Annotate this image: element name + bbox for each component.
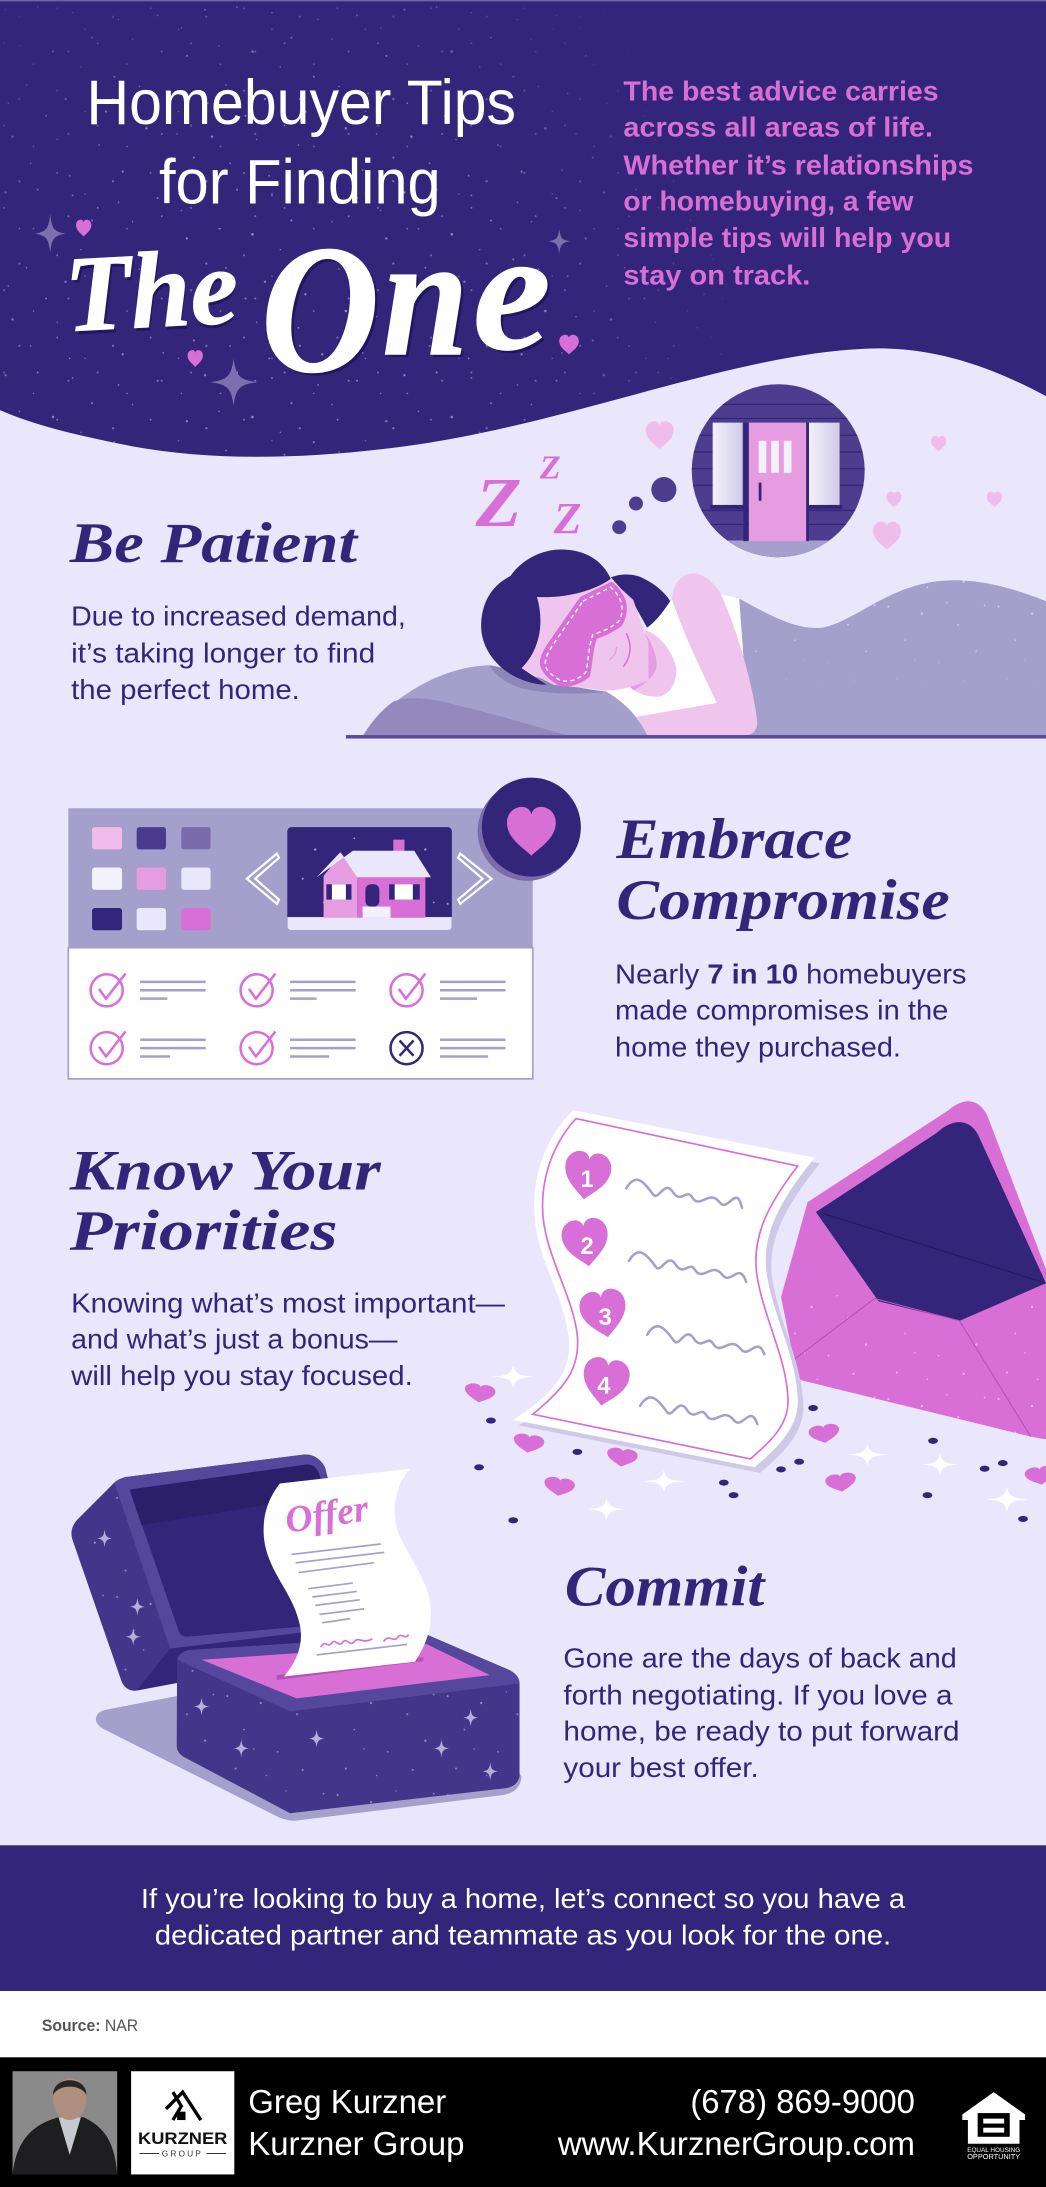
heading: embrace compromise [615,808,950,932]
heading: know your priorities: Know Your [69,1140,382,1203]
header panel [0,0,1046,474]
icon: equal housing opportunity: OPPORTUNITY [967,2154,1021,2161]
text: priorities body: Knowing what’s most important— [71,1287,505,1318]
icon: x mark [391,1032,423,1064]
source strip [0,1991,1046,2058]
title: the one: e [473,196,551,387]
heading: commit: Commit [565,1555,767,1618]
intro paragraph: The best advice carries [623,75,939,106]
illustration: sleeping woman dreaming of a home [346,384,1046,739]
illustration: ring box with offer [71,1455,522,1821]
text: be patient body: Due to increased demand, [71,601,406,632]
illustration: priorities list paper [513,1110,820,1473]
intro paragraph: Whether it’s relationships [623,149,973,180]
call to action band: dedicated partner and teammate as you look for the one. [155,1919,891,1950]
text: commit body: home, be ready to put forward [563,1716,960,1747]
text: compromise body: made compromises in the [615,995,948,1026]
heading: be patient: Be Patient [69,512,359,575]
heart number 1 [561,1149,613,1202]
heading: know your priorities: Priorities [69,1200,338,1263]
agent name [248,2084,464,2163]
icon: dream house bubble [692,384,865,558]
text: priorities body: and what’s just a bonus— [71,1324,398,1355]
text: compromise body [615,958,967,1063]
heading: embrace compromise: Embrace [615,808,852,871]
icon: heart badge [478,778,581,881]
source strip: Source: NAR [42,2016,138,2035]
illustration: envelope [774,1101,1046,1444]
intro paragraph: across all areas of life. [623,112,933,143]
title: homebuyer tips: Homebuyer Tips [86,68,516,138]
text: be patient body: the perfect home. [71,674,300,705]
heart number 3: 3 [599,1305,612,1331]
intro paragraph: simple tips will help you [623,222,951,253]
agency logo: KURZNER [138,2129,227,2148]
icon: sleeping z letters: Z [553,493,582,543]
heart number 2: 2 [581,1234,594,1260]
box lid [71,1455,365,1691]
icon: sleeping z letters: Z [539,449,561,486]
blanket [736,572,1046,739]
confetti hearts, stars and dots [463,1365,1046,1523]
icon: equal housing opportunity: EQUAL HOUSING [967,2147,1020,2154]
section: know your priorities [69,1101,1046,1523]
box shadow [96,1696,522,1821]
heart number 4 [579,1355,632,1410]
offer letter [264,1469,431,1677]
text: compromise body: Nearly 7 in 10 homebuyers [615,958,967,989]
section: be patient [69,384,1046,739]
title: the one: O [261,207,379,411]
intro paragraph: stay on track. [623,260,810,291]
title: the one: O [264,210,382,414]
call to action band [0,1845,1046,1991]
title: the one [62,196,554,414]
text: commit body: your best offer. [563,1752,759,1783]
agency logo [131,2071,234,2174]
icon: sleeping z letters: Z [475,465,522,542]
icon: equal housing opportunity [962,2092,1025,2161]
agent contact: www.KurznerGroup.com [557,2126,915,2163]
woman head with sleep mask [481,550,676,697]
agent photo [13,2071,117,2174]
text: be patient body [71,601,406,705]
title: the one: n [385,204,471,395]
text: priorities body [70,1287,505,1391]
text placeholder lines [140,982,506,1057]
agent name: Greg Kurzner [248,2084,446,2121]
heart number 2 [560,1216,612,1269]
title: the one: The [65,229,241,359]
agent contact: (678) 869-9000 [690,2084,915,2121]
call to action band: If you’re looking to buy a home, let’s connect so you have a [141,1883,906,1914]
pillow [363,665,647,735]
heart number 1: 1 [581,1167,594,1193]
title: the one: n [382,201,469,392]
intro paragraph: or homebuying, a few [623,186,914,217]
icon: floating hearts [646,421,1002,550]
panel: house search card [68,778,581,1079]
agent contact [557,2084,915,2163]
house photo [287,827,452,931]
icon: sleeping z letters [475,449,582,543]
agency logo: GROUP [162,2148,204,2158]
title: the one: e [476,198,554,389]
heading: embrace compromise: Compromise [616,869,950,932]
box base [177,1635,520,1813]
text: be patient body: it’s taking longer to find [71,638,375,669]
title: for finding: for Finding [159,148,441,218]
text: compromise body: home they purchased. [615,1032,901,1063]
icon: thought bubbles [612,477,676,534]
letter lines [291,1544,407,1655]
heart number 4: 4 [597,1373,611,1399]
text: commit body [563,1642,960,1783]
icon: carousel arrows [247,854,492,904]
text: commit body: Gone are the days of back and [563,1642,957,1673]
agent name: Kurzner Group [248,2126,464,2163]
heading: know your priorities [69,1140,382,1263]
text: priorities body: will help you stay focused. [70,1360,413,1391]
text: commit body: forth negotiating. If you love a [563,1679,953,1710]
check item row 1 [91,974,425,1006]
heart number 3 [577,1287,631,1341]
agent footer [0,2057,1046,2187]
checklist [91,974,506,1064]
decorative stars and hearts [35,214,579,406]
shirt and arm [607,573,757,735]
section: embrace compromise [68,778,967,1079]
title: the one: The [62,225,241,355]
check item row 2 [91,1031,275,1064]
section: commit [71,1455,960,1821]
color swatches [92,827,211,930]
floor line [346,735,1046,739]
intro paragraph [623,75,973,291]
squiggle lines [626,1180,764,1424]
offer wordmark: Offer [282,1487,372,1542]
